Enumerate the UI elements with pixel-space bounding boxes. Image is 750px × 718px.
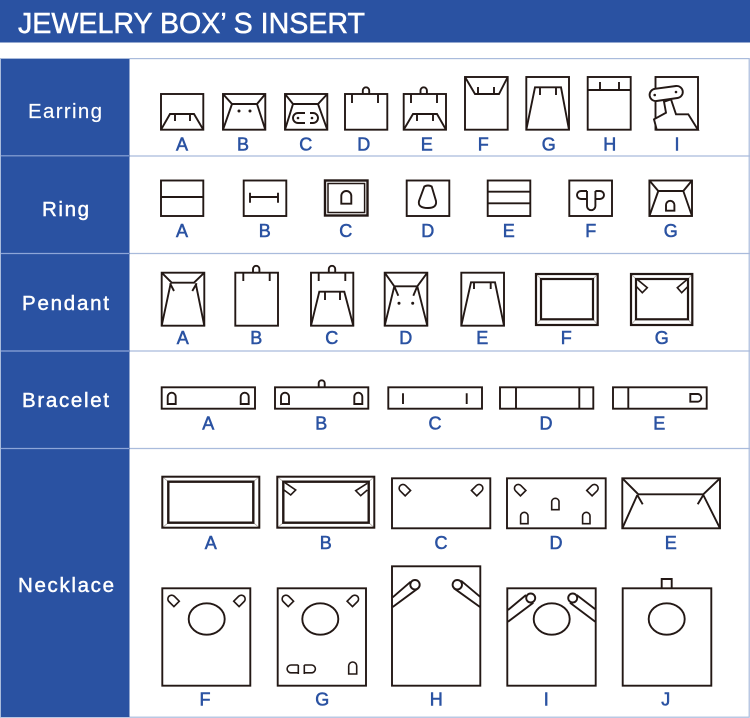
earring C	[285, 94, 327, 154]
panel: ring inserts	[161, 180, 692, 241]
necklace B: B	[320, 533, 332, 553]
ring E: E	[503, 221, 515, 241]
earring G: G	[542, 134, 556, 154]
earring B	[223, 94, 265, 154]
bracelet C	[388, 387, 482, 434]
ring F: F	[585, 221, 596, 241]
bracelet D	[500, 387, 593, 434]
pendant F: F	[561, 328, 572, 348]
earring F	[465, 77, 508, 154]
pendant B	[235, 266, 278, 348]
pendant C: C	[325, 328, 338, 348]
earring H	[588, 77, 631, 154]
earring B: B	[237, 134, 249, 154]
ring C: C	[339, 221, 352, 241]
necklace A: A	[205, 533, 217, 553]
earring G	[526, 77, 569, 154]
earring A	[161, 94, 203, 154]
earring I	[650, 77, 698, 154]
ring D	[407, 180, 449, 241]
earring H: H	[603, 134, 616, 154]
ring F	[569, 180, 612, 241]
pendant C	[311, 266, 353, 348]
title banner: JEWELRY BOX’ S INSERT	[18, 8, 365, 40]
necklace J: J	[661, 690, 670, 710]
necklace C: C	[434, 533, 448, 553]
pendant E	[461, 273, 504, 348]
bracelet A	[162, 387, 255, 434]
panel: bracelet inserts	[162, 380, 707, 434]
necklace I	[507, 588, 596, 710]
pendant A: A	[177, 328, 189, 348]
ring G: G	[664, 221, 678, 241]
necklace F	[162, 588, 250, 710]
necklace J	[623, 579, 711, 710]
bracelet E: E	[653, 414, 665, 434]
ring G	[649, 180, 692, 241]
necklace H	[392, 566, 480, 710]
necklace G	[278, 588, 366, 710]
bracelet E	[613, 387, 707, 434]
ring B: B	[259, 221, 271, 241]
category: Pendant: Pendant	[22, 292, 109, 315]
bracelet D: D	[540, 414, 552, 434]
pendant A	[162, 273, 204, 348]
panel: pendant inserts	[162, 266, 692, 348]
necklace G: G	[315, 690, 329, 710]
earring E	[404, 87, 446, 154]
pendant G	[631, 274, 692, 348]
bracelet B: B	[315, 414, 327, 434]
ring A	[161, 180, 203, 241]
ring A: A	[176, 221, 188, 241]
category: Ring: Ring	[42, 198, 89, 221]
panel: earring inserts	[161, 77, 698, 154]
earring D: D	[357, 134, 370, 154]
earring D	[345, 87, 387, 154]
ring D: D	[421, 221, 434, 241]
category: Necklace: Necklace	[18, 574, 114, 597]
earring I: I	[674, 134, 680, 154]
pendant D	[385, 273, 427, 348]
title banner	[0, 0, 750, 42]
category: Earring: Earring	[28, 100, 102, 123]
earring E: E	[421, 134, 433, 154]
pendant G: G	[655, 328, 669, 348]
pendant B: B	[250, 328, 262, 348]
necklace I: I	[544, 690, 549, 710]
ring E	[488, 180, 530, 241]
bracelet B	[275, 380, 368, 434]
necklace D	[507, 478, 606, 553]
category: Bracelet: Bracelet	[22, 389, 109, 412]
necklace F: F	[200, 690, 210, 710]
earring F: F	[478, 134, 489, 154]
necklace H: H	[430, 690, 443, 710]
necklace B	[277, 477, 374, 553]
necklace D: D	[550, 533, 562, 553]
pendant D: D	[399, 328, 412, 348]
necklace C	[392, 478, 490, 553]
necklace E	[622, 478, 720, 553]
earring A: A	[176, 134, 188, 154]
earring C: C	[299, 134, 312, 154]
sidebar: categories	[1, 59, 130, 717]
panel: necklace inserts	[162, 477, 720, 710]
ring C	[325, 180, 368, 241]
ring B	[244, 180, 286, 241]
necklace A	[162, 477, 259, 553]
bracelet A: A	[202, 414, 214, 434]
pendant F	[536, 274, 598, 348]
bracelet C: C	[428, 414, 442, 434]
necklace E: E	[665, 533, 677, 553]
pendant E: E	[476, 328, 488, 348]
